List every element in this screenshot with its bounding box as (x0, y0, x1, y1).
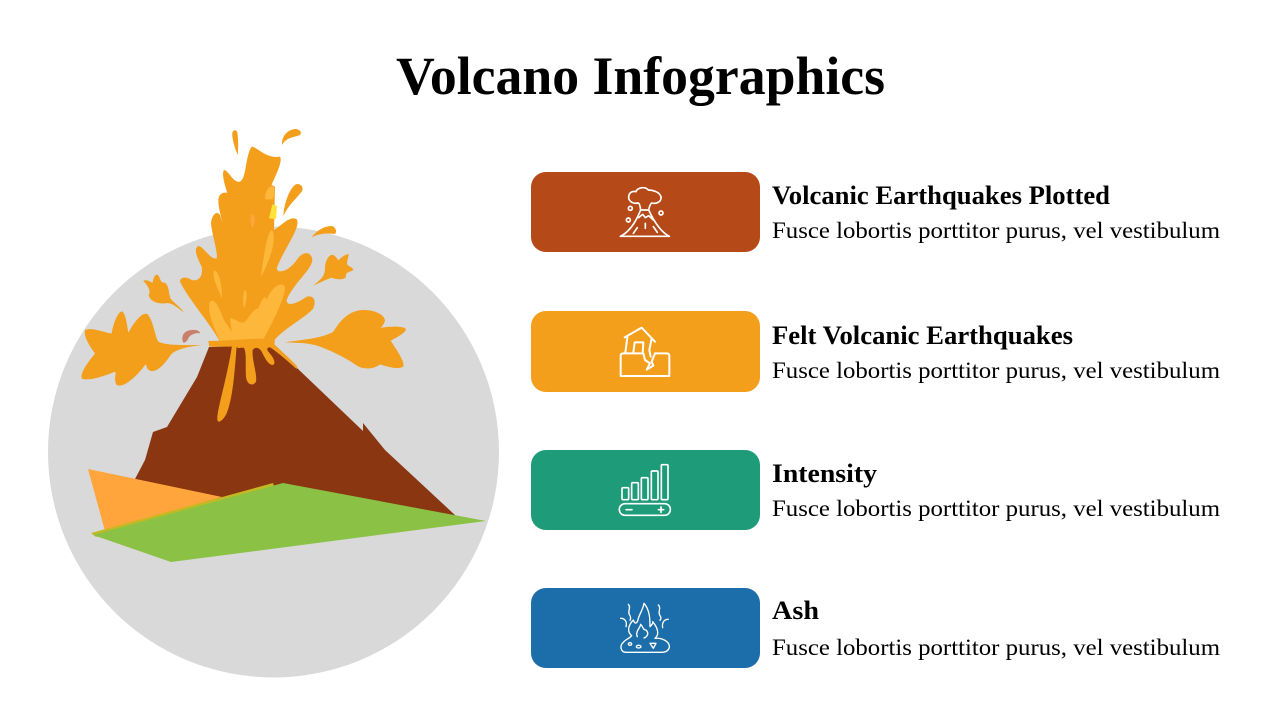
flying drops (232, 129, 336, 238)
inner light lava (209, 285, 285, 341)
body text: Fusce lobortis porttitor purus, vel vestibulum (772, 496, 1220, 521)
body text: Fusce lobortis porttitor purus, vel vestibulum (772, 635, 1220, 660)
orange ground (88, 469, 222, 531)
heading: Volcanic Earthquakes Plotted (772, 181, 1111, 210)
background circle (48, 226, 499, 678)
light streaks (214, 186, 274, 308)
icon: fire and ash (621, 603, 669, 652)
panel: intensity (531, 450, 1220, 530)
body text: Fusce lobortis porttitor purus, vel vestibulum (772, 358, 1220, 383)
crater rim (208, 339, 275, 347)
panel: volcanic earthquakes plotted (531, 172, 1220, 252)
green box (531, 450, 760, 530)
green ground (93, 483, 486, 562)
panel: felt volcanic earthquakes (531, 311, 1220, 392)
heading: Intensity (772, 459, 877, 488)
icon: signal bars (619, 465, 670, 515)
small orange drop (250, 214, 255, 228)
volcano mountain (130, 345, 456, 530)
heading: Felt Volcanic Earthquakes (772, 321, 1073, 350)
upper-left lava blob (143, 275, 184, 313)
icon: cracked house (621, 328, 669, 376)
upper-right lava blob (313, 254, 353, 286)
olive ground edge (91, 483, 274, 537)
volcano illustration (48, 129, 499, 678)
heading: Ash (772, 596, 820, 625)
left lava blob (81, 312, 202, 386)
title: Volcano Infographics (396, 46, 885, 106)
icon: erupting volcano (620, 188, 669, 236)
right lava blob (285, 310, 406, 368)
panel: ash (531, 588, 1220, 668)
lava flows down slope (217, 344, 297, 422)
main lava plume (180, 147, 315, 342)
lava eruption (81, 129, 406, 422)
pink lava ember (182, 330, 200, 343)
orange box (531, 311, 760, 392)
blue box (531, 588, 760, 668)
body text: Fusce lobortis porttitor purus, vel vestibulum (772, 218, 1220, 243)
yellow spark (269, 204, 277, 219)
rust box (531, 172, 760, 252)
